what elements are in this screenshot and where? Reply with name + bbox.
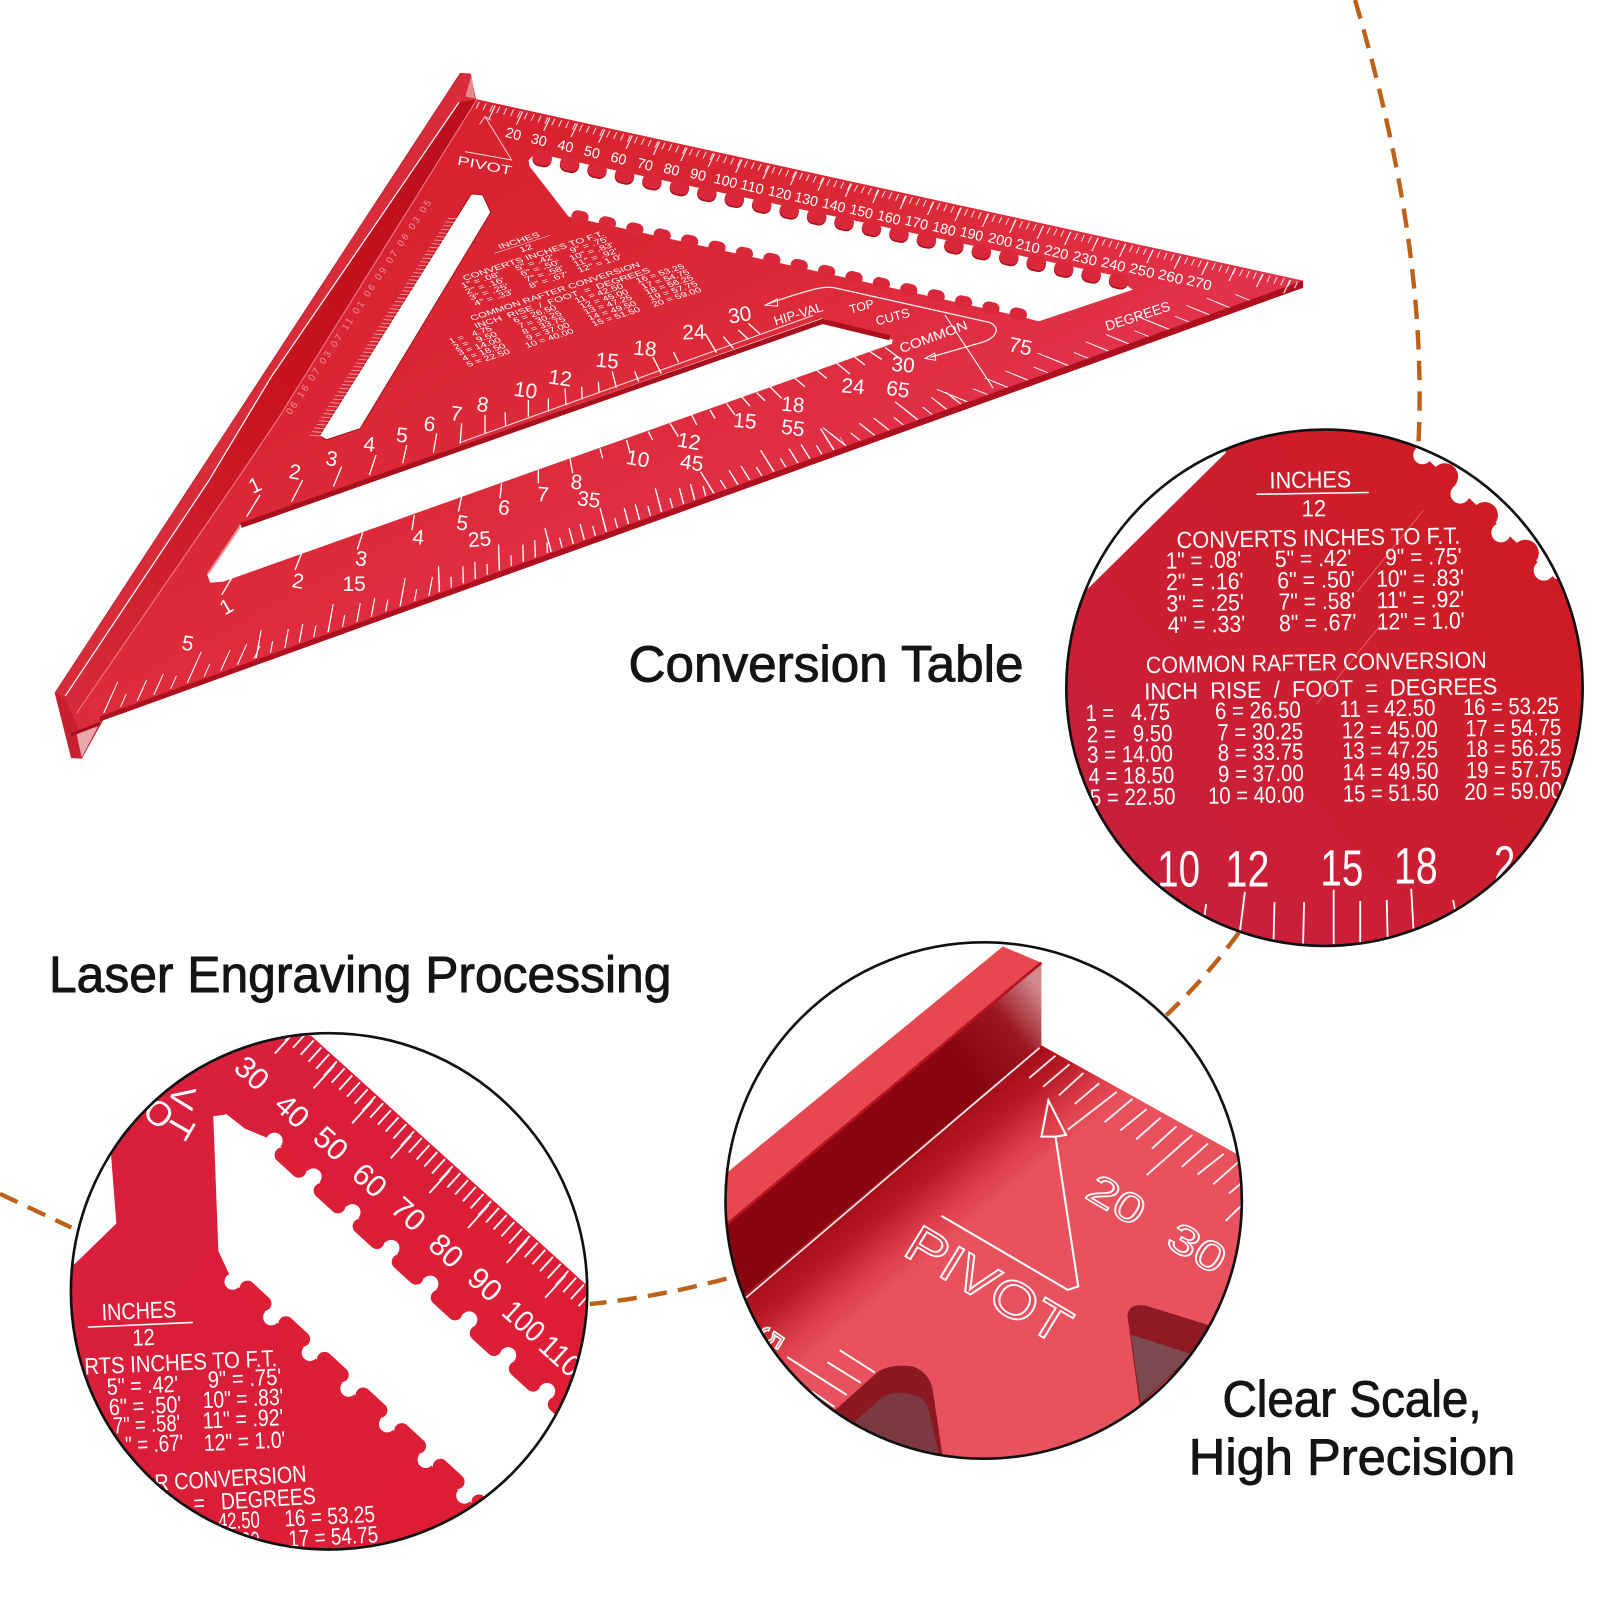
engraved tables on square: 4 = 18.50 — [460, 342, 508, 363]
plate body — [721, 1045, 1250, 1467]
engraved table fragments: 42.50 — [217, 1506, 260, 1535]
lower inch numbers: 3 — [353, 547, 369, 572]
hip-val / common arrows and labels: HIP-VAL — [772, 299, 825, 329]
engraved tables on square: 15 = 51.50 — [590, 306, 643, 328]
ruler numbers: 60 — [345, 1157, 393, 1205]
engraved conversion tables: 11 = 42.50 — [1339, 694, 1436, 722]
partial pivot lettering: O — [136, 1091, 181, 1138]
right window — [1127, 1305, 1212, 1405]
engraved tables on square: 2 = 9.50 — [452, 331, 499, 351]
upper inch numbers: 4 — [363, 433, 377, 457]
engraved tables on square: 9 = 37.00 — [525, 321, 572, 342]
engraved tables on square: 9" = .75' — [568, 236, 611, 255]
pivot label: PIVOT — [895, 1215, 1081, 1356]
degree row numbers — [180, 333, 1034, 656]
degree row numbers: 55 — [780, 416, 806, 442]
tooth bumps — [1432, 463, 1539, 566]
hip-val / common arrows and labels — [765, 287, 1172, 388]
engraved conversion tables: 12" = 1.0' — [1377, 607, 1465, 635]
lower inch numbers: 7 — [536, 483, 550, 507]
engraved tables on square: 16 = 53.25 — [634, 263, 687, 285]
large scale numbers: 2 — [1494, 836, 1515, 893]
red plate — [61, 1031, 602, 1561]
degree numbers top scale: 260 — [1156, 267, 1185, 288]
engraved conversion tables: 2 = 9.50 — [1087, 720, 1173, 747]
degree numbers top scale: 100 — [712, 171, 739, 192]
ruler numbers: 50 — [307, 1120, 355, 1168]
degree row numbers: 35 — [576, 487, 602, 513]
engraved conversion tables: 19 = 57.75 — [1466, 756, 1562, 783]
panel: laser engraving magnified circle — [70, 1032, 589, 1551]
engraved conversion tables: 6 = 26.50 — [1215, 697, 1301, 724]
engraved tables on square: 3 = 14.00 — [456, 336, 503, 357]
engraved conversion tables: 9 = 37.00 — [1218, 760, 1304, 787]
heading: clear scale high precision: Clear Scale, — [1222, 1370, 1482, 1427]
scale numbers 20 and 30 — [1079, 1165, 1235, 1283]
upper inch numbers: 8 — [475, 393, 490, 417]
engraved conversion tables: COMMON RAFTER CONVERSION — [1146, 647, 1487, 678]
engraved conversion tables: 15 = 51.50 — [1343, 779, 1439, 807]
panel: clear scale magnified circle: 5 — [751, 1321, 792, 1355]
engraved tables on square: 8" = .67' — [527, 271, 571, 290]
scale ticks — [1203, 889, 1455, 944]
engraved table fragments: 11" = .92' — [202, 1404, 284, 1434]
large scale numbers — [1160, 846, 1513, 887]
degree numbers top scale: 210 — [1014, 236, 1041, 258]
engraved tables on square: 12" = 1.0' — [576, 253, 624, 275]
upper tooth bumps — [274, 1148, 560, 1414]
engraved tables on square: COMMON RAFTER CONVERSION — [469, 261, 642, 323]
engraved table fragments: = DEGREES — [193, 1483, 316, 1516]
degree row numbers: 5 — [180, 632, 195, 656]
engraved tables on square: 2" = .16' — [464, 277, 507, 296]
engraved conversion tables: 8 = 33.75 — [1218, 738, 1304, 766]
panel: clear scale magnified circle — [721, 942, 1250, 1467]
ruler ticks — [274, 1036, 586, 1307]
lower notches — [224, 1274, 470, 1504]
degree numbers top scale: 60 — [609, 150, 628, 169]
toothed upper window — [529, 153, 1133, 321]
engraved conversion tables: 3 = 14.00 — [1087, 740, 1173, 768]
engraved conversion tables: 1 = 4.75 — [1085, 699, 1170, 726]
upper inch numbers: 1 — [245, 473, 265, 499]
engraved tables on square: 10" = .83' — [568, 241, 616, 263]
partial pivot lettering: V — [161, 1083, 202, 1113]
engraved conversion tables: INCHES — [1269, 466, 1351, 493]
engraved conversion tables — [1082, 463, 1562, 811]
engraved tables on square: 20 = 59.00 — [650, 286, 704, 309]
panel: conversion table magnified circle — [1065, 428, 1584, 948]
degree numbers top scale: 240 — [1099, 255, 1127, 276]
partial pivot lettering — [146, 1088, 196, 1142]
engraved conversion tables: CONVERTS INCHES TO F.T. — [1176, 523, 1460, 553]
engraved tables on square: 12 = 45.00 — [578, 288, 631, 311]
engraved tables on square: CONVERTS INCHES TO F.T. — [461, 230, 606, 283]
lower inch numbers: 18 — [780, 393, 805, 418]
engraved tables on square: 8 = 33.75 — [521, 315, 568, 336]
large scale numbers: 18 — [1394, 838, 1438, 895]
engraved tables on square: 7" = .58' — [523, 265, 566, 284]
degree numbers top scale: 190 — [958, 224, 985, 245]
left window inner — [854, 1393, 938, 1454]
degree numbers top scale: 30 — [529, 131, 548, 151]
engraved conversion tables: 13 = 47.25 — [1342, 736, 1438, 764]
lower tooth bumps — [240, 1280, 484, 1504]
rail dark band — [65, 100, 477, 713]
engraved conversion tables: 3" = .25' — [1166, 589, 1244, 617]
flange lip — [55, 73, 476, 758]
upper notches — [266, 1132, 556, 1398]
engraved tables on square: 1" = .08' — [460, 271, 502, 290]
upper inch numbers — [245, 302, 753, 499]
lower inch numbers: 30 — [890, 353, 916, 378]
engraved table fragments: R CONVERSION — [154, 1461, 307, 1496]
upper inch numbers: 24 — [682, 321, 706, 345]
upper inch numbers: 15 — [595, 349, 620, 374]
degree numbers top scale: 40 — [556, 137, 575, 157]
engraved tables on square: 5 = 22.50 — [465, 348, 512, 369]
engraved tables on square: 5" = .42' — [514, 253, 556, 273]
lower inch numbers: 12 — [675, 428, 702, 455]
upper inch numbers: 10 — [512, 378, 539, 404]
degree numbers top scale: 270 — [1185, 273, 1213, 295]
hip-val / common arrows and labels: CUTS — [874, 305, 911, 328]
engraved tables on square: INCHES — [497, 231, 542, 251]
rail lines — [65, 102, 459, 696]
engraved tables on square: 17 = 54.75 — [639, 268, 692, 291]
engraved table fragments: 45.00 — [217, 1527, 260, 1555]
engraved tables on square: INCH RISE / FOOT = DEGREES — [473, 267, 653, 330]
lower row ticks — [222, 347, 898, 595]
engraved tables on square: 12 — [518, 243, 535, 254]
long lower window — [207, 318, 893, 583]
engraved conversion tables: 8" = .67' — [1279, 609, 1357, 636]
engraved tables on square: 6 = 26.50 — [512, 304, 559, 325]
dashed connecting arc — [0, 0, 1420, 1304]
upper inch numbers: 30 — [726, 302, 753, 329]
engraved conversion tables: 17 = 54.75 — [1465, 714, 1561, 741]
engraved table fragments: 16 = 53.25 — [284, 1501, 376, 1532]
engraved conversion tables: 7 = 30.25 — [1217, 718, 1303, 745]
engraved table fragments: 12" = 1.0' — [203, 1426, 286, 1456]
engraved conversion tables: 7" = .58' — [1278, 588, 1355, 615]
upper inch numbers: 18 — [632, 337, 657, 361]
flange pale inner — [77, 727, 98, 758]
upper inch numbers: 3 — [324, 447, 339, 472]
upper inch numbers: 2 — [287, 460, 303, 485]
degree numbers top scale: 20 — [504, 125, 523, 144]
lower inch numbers: 5 — [455, 511, 470, 536]
bottom scale ticks — [106, 292, 1248, 707]
engraved conversion tables: 5 = 22.50 — [1090, 783, 1176, 811]
lower inch numbers: 24 — [840, 374, 866, 399]
ruler numbers: 110 — [532, 1328, 588, 1384]
engraved table fragments: INCHES — [101, 1296, 177, 1325]
engraved tables on square: 7 = 30.25 — [517, 310, 564, 331]
ruler numbers: 90 — [461, 1261, 509, 1309]
degree numbers top scale: 230 — [1071, 248, 1099, 270]
lower inch numbers: 2 — [290, 569, 306, 594]
engraved tables on square: 10 = 40.00 — [524, 327, 576, 350]
engraved table fragments: 9" = .75' — [207, 1364, 282, 1393]
lower inch numbers: 1 — [216, 594, 237, 620]
lower inch numbers — [216, 353, 916, 620]
heading: conversion table: Conversion Table — [629, 636, 1023, 693]
lip top face — [721, 947, 1041, 1230]
lower inch numbers: 8 — [570, 471, 583, 495]
degree numbers top scale: 250 — [1128, 261, 1156, 282]
large scale numbers: 12 — [1226, 841, 1269, 898]
degree numbers top scale: 110 — [739, 177, 765, 198]
lower inch numbers: 4 — [412, 526, 426, 550]
degree row numbers: 65 — [885, 377, 911, 403]
upper row ticks — [247, 323, 760, 517]
engraved tables on square: 4" = .33' — [472, 289, 516, 308]
partial pivot lettering: T — [158, 1108, 201, 1145]
degree row numbers: 45 — [679, 450, 705, 476]
lower window rim — [241, 321, 890, 526]
degree numbers top scale: 90 — [688, 166, 708, 185]
ruler numbers: 100 — [495, 1294, 552, 1349]
ruler numbers: 80 — [422, 1227, 470, 1275]
lower inch numbers: 10 — [624, 446, 651, 473]
rail numbers: 06 16 07 03 07 11 01 06 09 07 06 03 05 — [284, 198, 434, 417]
heading: clear scale high precision: High Precision — [1189, 1428, 1515, 1485]
toothed window — [213, 1114, 555, 1503]
engraved conversion tables: 1" = .08' — [1166, 546, 1241, 574]
upper teeth — [540, 158, 1127, 282]
degree numbers top scale: 170 — [903, 213, 930, 234]
degree numbers top scale: 130 — [793, 189, 819, 211]
engraved conversion tables: 12 — [1301, 495, 1326, 522]
hip-val / common arrows and labels: COMMON — [897, 317, 969, 356]
hip-val / common arrows and labels: TOP — [848, 297, 875, 317]
bottom edge dark strip — [100, 281, 1303, 721]
engraved conversion tables: INCH RISE / FOOT = DEGREES — [1144, 673, 1498, 705]
engraved conversion tables: 16 = 53.25 — [1463, 693, 1559, 720]
degree numbers top scale: 120 — [766, 183, 793, 204]
degree numbers top scale: 80 — [662, 161, 681, 180]
engraved tables on square: 13 = 47.25 — [582, 294, 635, 316]
engraved table fragments: 5" = .42' — [106, 1371, 179, 1400]
engraved table fragments: RTS INCHES TO F.T. — [84, 1345, 278, 1379]
square body — [65, 99, 1303, 721]
right window inner — [1131, 1335, 1192, 1403]
degree numbers top scale: 70 — [635, 156, 655, 175]
flange top pale inner — [465, 75, 475, 98]
degree numbers top scale: 50 — [582, 143, 602, 163]
degree numbers top scale: 200 — [986, 230, 1014, 252]
heading: clear scale high precision — [1189, 1370, 1515, 1485]
engraved conversion tables: 12 = 45.00 — [1342, 716, 1438, 743]
engraved table fragments: 6" = .50' — [108, 1391, 182, 1420]
upper inch numbers: 7 — [449, 402, 463, 426]
engraved conversion tables: 20 = 59.00 — [1464, 777, 1562, 805]
engraved tables on square: 11 = 42.50 — [573, 283, 626, 305]
engraved conversion tables: 10 = 40.00 — [1208, 781, 1304, 809]
scratch — [1316, 510, 1423, 704]
engraved table fragments: 12 — [132, 1324, 155, 1351]
engraved conversion tables: 14 = 49.50 — [1342, 758, 1439, 785]
scale numbers 20 and 30: 20 — [1079, 1165, 1154, 1235]
pivot mark: PIVOT — [456, 153, 513, 178]
degree numbers top scale: 160 — [875, 208, 902, 229]
flange lower end — [55, 693, 82, 758]
engraved tables on square — [404, 198, 704, 369]
pivot arrow — [941, 1100, 1078, 1290]
heading: laser engraving: Laser Engraving Processing — [49, 946, 671, 1003]
ruler numbers: 40 — [268, 1087, 316, 1135]
lip dark side — [721, 963, 1041, 1316]
ruler numbers — [228, 1049, 588, 1384]
large scale numbers: 15 — [1320, 840, 1363, 897]
engraved conversion tables: 10" = .83' — [1376, 564, 1464, 592]
degree numbers top scale — [504, 125, 1213, 295]
ruler ticks — [1029, 1056, 1241, 1221]
engraved table fragments: 7" = .58' — [112, 1410, 181, 1439]
engraved table fragments: " = .67' — [125, 1430, 184, 1458]
degree numbers top scale: 180 — [931, 219, 957, 240]
engraved tables on square: 19 = 57.75 — [647, 280, 700, 303]
red plate — [1068, 430, 1582, 945]
engraved tables on square: 11" = .92' — [572, 247, 620, 269]
ruler numbers: 70 — [384, 1190, 432, 1238]
engraved table fragments — [84, 1296, 379, 1555]
edge highlight line — [745, 1048, 1040, 1298]
engraved conversion tables: 2" = .16' — [1166, 568, 1244, 595]
degree numbers top scale: 150 — [848, 202, 875, 223]
engraved table fragments: 10" = .83' — [202, 1384, 284, 1413]
pivot mark — [456, 117, 513, 178]
engraved conversion tables: 4" = .33' — [1168, 611, 1245, 638]
engraved conversion tables: 9" = .75' — [1385, 543, 1462, 570]
main product: red rafter square — [55, 73, 1303, 758]
rail ticks — [316, 217, 456, 436]
tooth notches — [1413, 446, 1554, 581]
lower inch numbers: 15 — [732, 409, 757, 434]
engraved tables on square: 18 = 56.25 — [643, 274, 696, 297]
engraved conversion tables: 11" = .92' — [1376, 586, 1465, 613]
lower inch numbers: 6 — [497, 496, 511, 520]
engraved conversion tables: 5" = .42' — [1275, 545, 1352, 572]
engraved conversion tables: 4 = 18.50 — [1088, 762, 1174, 789]
engraved tables on square: 3" = .25' — [468, 283, 511, 302]
engraved table fragments: 17 = 54.75 — [288, 1521, 379, 1552]
upper teeth rim — [539, 159, 1127, 284]
lower-left ticks and numeral — [787, 1350, 875, 1407]
upper inch numbers: 5 — [395, 424, 409, 448]
engraved tables on square: 6" = .50' — [519, 259, 562, 278]
degree row numbers: 15 — [342, 573, 366, 596]
upper inch numbers: 12 — [547, 366, 573, 392]
ruler numbers: 30 — [228, 1049, 276, 1097]
degree numbers top scale: 220 — [1042, 242, 1070, 264]
hip-val / common arrows and labels: DEGREES — [1103, 299, 1172, 334]
engraved conversion tables: 18 = 56.25 — [1465, 734, 1562, 762]
slot window left — [319, 194, 491, 440]
degree numbers top scale: 140 — [820, 196, 847, 217]
large scale numbers: 10 — [1157, 841, 1200, 898]
left window — [835, 1366, 942, 1454]
degree row numbers: 75 — [1007, 333, 1034, 361]
top scale ticks — [476, 105, 1299, 289]
degree row numbers: 25 — [467, 527, 492, 552]
upper inch numbers: 6 — [422, 412, 437, 437]
engraved tables on square: 14 = 49.50 — [586, 300, 639, 322]
scale numbers 20 and 30: 30 — [1159, 1213, 1235, 1283]
lower teeth — [578, 216, 1031, 317]
engraved tables on square: 1 = 4.75 — [447, 325, 494, 346]
engraved conversion tables: 6" = .50' — [1277, 566, 1355, 593]
